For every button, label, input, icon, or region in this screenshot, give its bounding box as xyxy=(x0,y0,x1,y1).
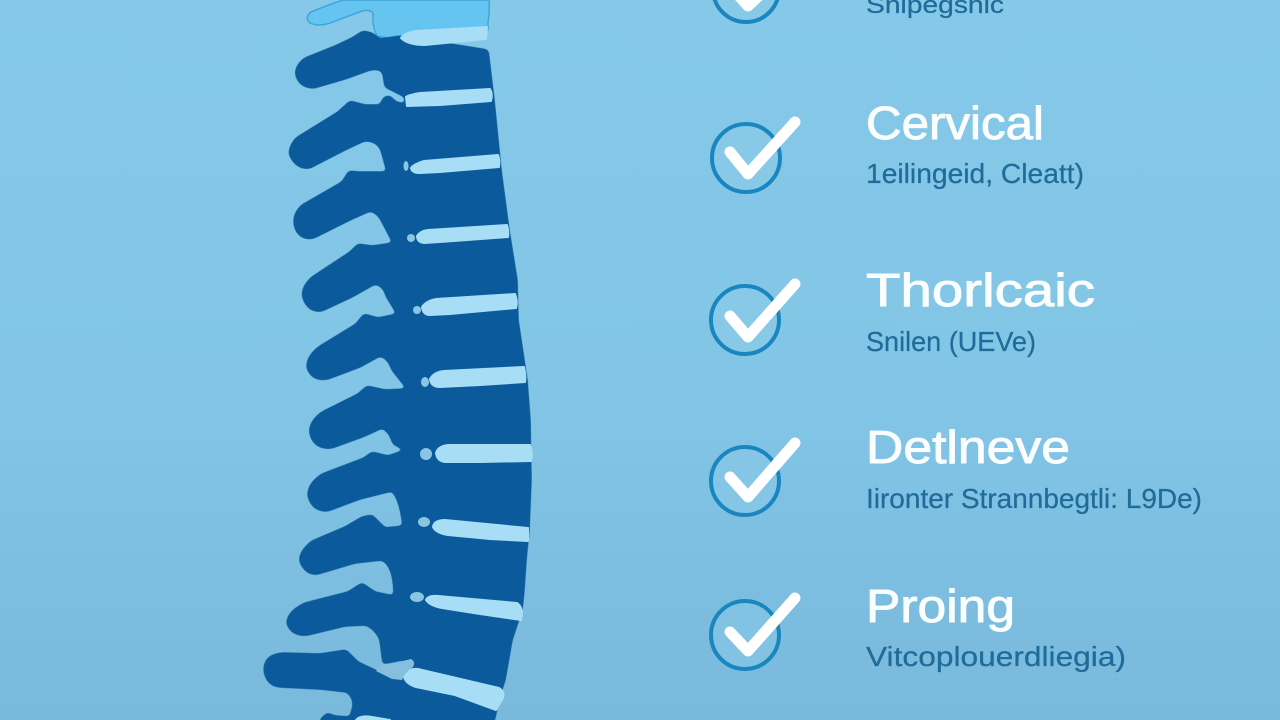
small foramen dots xyxy=(404,161,432,602)
icon: check circle xyxy=(713,0,797,22)
item: proing xyxy=(711,580,1126,672)
disc 9 xyxy=(426,596,522,620)
icon: check circle xyxy=(712,122,795,192)
top light vertebra xyxy=(307,0,489,40)
disc 5 xyxy=(422,294,517,315)
disc 6 xyxy=(430,367,525,387)
disc 2 xyxy=(406,89,492,106)
disc 8 xyxy=(433,520,528,541)
item: detlneve xyxy=(711,421,1202,515)
notch at lowest vertebra xyxy=(376,659,414,680)
heading: Proing xyxy=(866,580,1015,632)
intervertebral discs xyxy=(356,27,532,720)
dark vertebral column xyxy=(264,31,531,720)
heading: Detlneve xyxy=(866,421,1070,473)
disc 7 xyxy=(436,445,532,462)
disc 3 xyxy=(411,155,499,173)
disc 4 xyxy=(417,225,508,243)
heading: Cervical xyxy=(866,97,1044,149)
item: top partial xyxy=(713,0,1004,22)
icon: check circle xyxy=(711,598,795,669)
spine illustration xyxy=(264,0,532,720)
disc 10 xyxy=(404,669,504,710)
disc 11 xyxy=(356,716,390,720)
item: cervical xyxy=(712,97,1084,192)
subtitle: Iironter Strannbegtli: L9De) xyxy=(866,483,1202,514)
subtitle: 1eilingeid, Cleatt) xyxy=(866,158,1084,189)
icon: check circle xyxy=(711,443,795,515)
subtitle: Snilen (UEVe) xyxy=(866,326,1036,357)
item: thoracic xyxy=(711,264,1095,357)
heading: Thorlcaic xyxy=(866,264,1095,316)
icon: check circle xyxy=(711,284,795,354)
disc 1 xyxy=(401,27,487,45)
subtitle: Vitcoplouerdliegia) xyxy=(866,641,1126,672)
